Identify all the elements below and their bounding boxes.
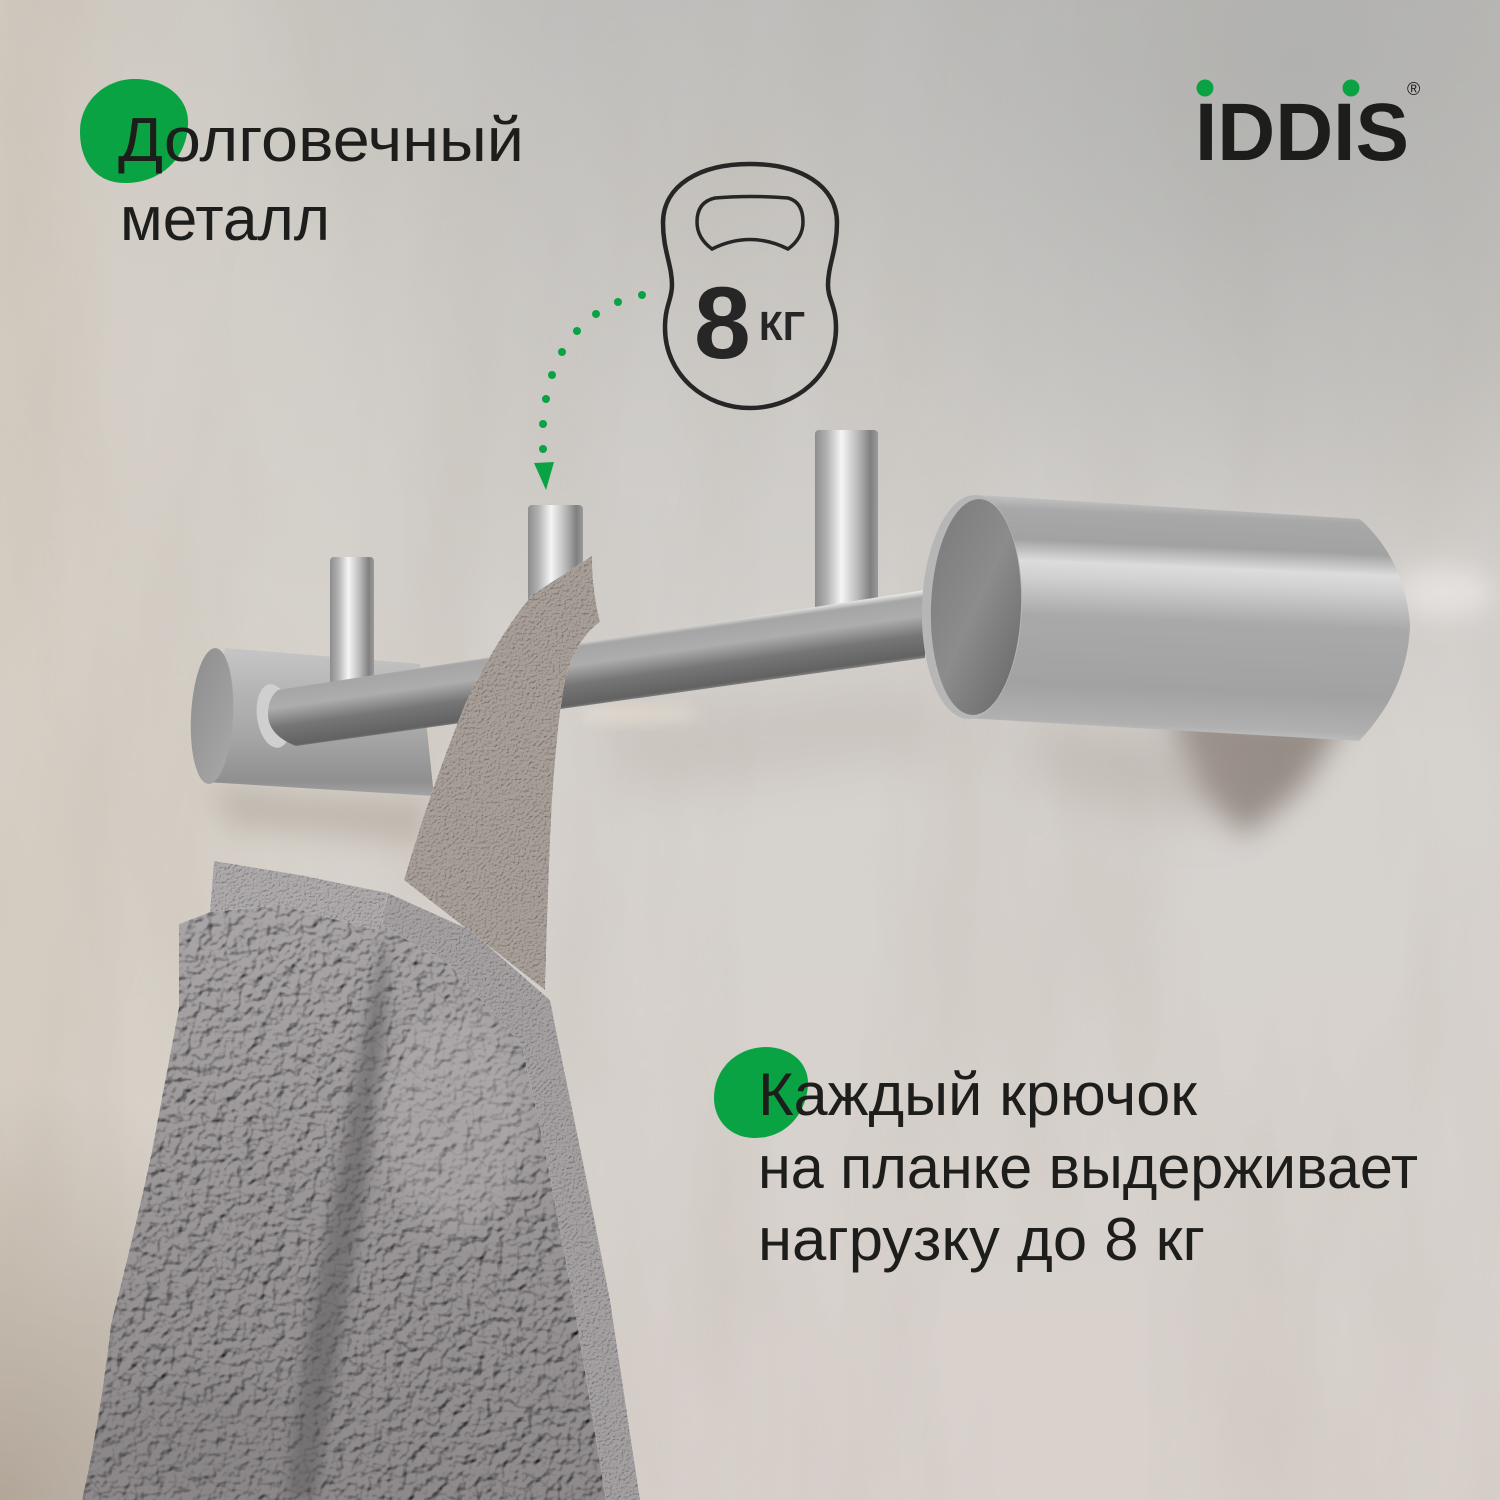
accent blob: lower caption bbox=[714, 1047, 808, 1138]
caption: load per hook: Каждый крючок bbox=[758, 1061, 1198, 1128]
logo: ® bbox=[1407, 79, 1420, 99]
hook bar product bbox=[187, 430, 1410, 796]
wall shadows bbox=[205, 680, 1350, 845]
heading: durable metal bbox=[118, 106, 524, 254]
left end mount bbox=[187, 647, 434, 796]
terry towel body bbox=[82, 861, 640, 1500]
accent blob: top heading bbox=[80, 79, 188, 183]
caption: load per hook: на планке выдерживает bbox=[758, 1134, 1418, 1201]
towel shading bbox=[90, 937, 530, 1500]
towel side hem bbox=[382, 893, 640, 1500]
towel bbox=[82, 556, 640, 1500]
horizontal bar bbox=[253, 590, 925, 750]
icon: kettlebell 8 kg: КГ bbox=[759, 303, 805, 349]
peg 1 bbox=[330, 557, 374, 685]
icon: kettlebell 8 kg: 8 bbox=[694, 266, 751, 380]
linen loop bbox=[404, 556, 600, 990]
caption: load per hook bbox=[758, 1061, 1418, 1273]
caption: load per hook: нагрузку до 8 кг bbox=[758, 1206, 1205, 1273]
peg 3 bbox=[815, 430, 878, 615]
arrow: dotted pointer to hook bbox=[534, 291, 646, 490]
icon: kettlebell 8 kg bbox=[663, 164, 837, 408]
peg 2 bbox=[528, 505, 583, 605]
logo: IDDIS bbox=[1195, 87, 1409, 178]
right cylinder mount bbox=[918, 493, 1410, 741]
heading: durable metal: Долговечный bbox=[118, 106, 524, 175]
heading: durable metal: металл bbox=[120, 185, 330, 254]
towel top hem bbox=[210, 861, 388, 930]
